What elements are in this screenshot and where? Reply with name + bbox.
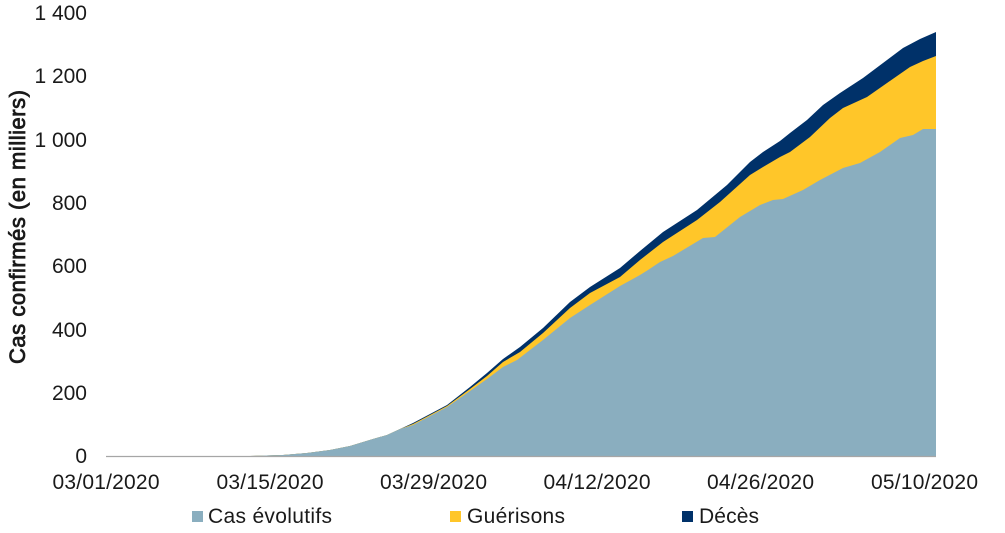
x axis labels: 04/26/2020 bbox=[707, 471, 814, 494]
y axis labels: 0 bbox=[75, 445, 87, 468]
y axis labels: 1 400 bbox=[34, 2, 87, 25]
x axis labels: 03/01/2020 bbox=[52, 471, 160, 494]
legend: guérisons: Guérisons bbox=[467, 505, 565, 528]
y axis labels: 1 000 bbox=[34, 129, 87, 152]
y axis labels: 800 bbox=[52, 192, 87, 215]
y axis labels: 1 200 bbox=[34, 65, 87, 88]
area: décès bbox=[250, 32, 936, 456]
y axis title: Cas confirmés (en milliers) bbox=[5, 90, 30, 364]
legend: cas évolutifs: Cas évolutifs bbox=[208, 505, 332, 528]
y axis labels: 200 bbox=[52, 382, 87, 405]
legend bbox=[192, 505, 759, 528]
area: guérisons bbox=[250, 56, 936, 456]
y axis labels: 400 bbox=[52, 319, 87, 342]
x axis labels bbox=[52, 471, 978, 494]
x axis labels: 03/15/2020 bbox=[216, 471, 324, 494]
x axis labels: 03/29/2020 bbox=[380, 471, 487, 494]
y axis labels: 600 bbox=[52, 255, 87, 278]
x axis line bbox=[106, 456, 936, 458]
y axis labels bbox=[34, 2, 87, 468]
x axis labels: 04/12/2020 bbox=[544, 471, 650, 494]
legend: décès: Décès bbox=[699, 505, 759, 528]
area: cas évolutifs bbox=[250, 129, 936, 456]
x axis labels: 05/10/2020 bbox=[871, 471, 978, 494]
